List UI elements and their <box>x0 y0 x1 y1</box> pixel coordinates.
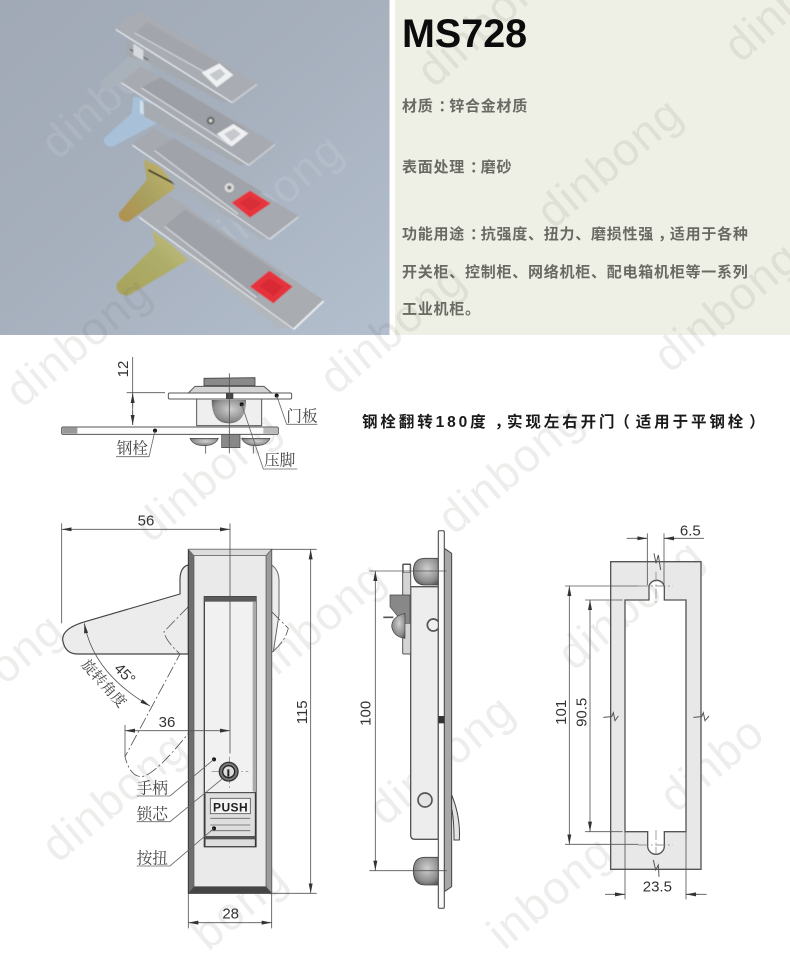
watermarks: dinbong <box>31 720 197 872</box>
lever <box>452 795 460 840</box>
panel: specification background <box>395 0 790 335</box>
text block: specifications: 功能用途 ：抗强度、扭力、磨损性强 ，适用于各种 <box>402 225 749 243</box>
label: button: 按扭 <box>137 850 168 868</box>
door plate <box>438 531 444 908</box>
text block: specifications: 材质 ：锌合金材质 <box>402 97 528 115</box>
lock 4 <box>116 230 188 296</box>
dimension: 100 <box>357 571 447 871</box>
cutout plate <box>611 562 701 869</box>
push button: PUSH <box>213 800 248 814</box>
dimension: 56 <box>62 512 230 753</box>
recess <box>204 597 256 847</box>
dimension: 115: 115 <box>294 700 311 724</box>
label: lock core <box>137 779 222 824</box>
watermarks: dinbong <box>229 550 395 702</box>
watermarks: dinbong <box>124 400 290 552</box>
dimension: 28: 28 <box>222 906 239 923</box>
label: door panel <box>275 394 318 426</box>
dimension: 28 <box>188 893 272 928</box>
lock 2 <box>104 97 160 147</box>
watermarks: dinbong <box>547 528 713 680</box>
dimension: 36: 36 <box>159 714 175 731</box>
dimension: 101 <box>553 586 638 844</box>
text block: specifications <box>402 97 749 318</box>
panel: product photo: dinbong <box>187 122 353 274</box>
watermarks: dinbong <box>526 86 692 238</box>
label: handle: 手柄 <box>137 780 168 798</box>
dimension: 12 <box>115 357 165 425</box>
bracket <box>403 564 411 654</box>
dimension: 6.5: 6.5 <box>680 522 701 539</box>
dimension: 100: 100 <box>357 701 374 726</box>
diagram: front view with dimensions <box>62 512 317 928</box>
watermarks: dinbong <box>427 392 593 544</box>
dimension: 23.5 <box>605 832 707 899</box>
label: button <box>137 826 216 868</box>
diagram: top section view <box>62 357 318 470</box>
watermarks: dinbo <box>649 705 774 822</box>
heading: bolt rotation note: 钢栓翻转180度 ，实现左右开门（适用于平钢栓） <box>362 412 768 431</box>
photo: four push-button locks <box>100 11 324 330</box>
break marks <box>603 553 709 877</box>
dimension: 36 <box>125 714 230 757</box>
label: door panel: 门板 <box>286 408 318 426</box>
dimension: 90.5 <box>574 600 623 832</box>
watermarks: dinbong <box>358 683 524 835</box>
handle <box>63 565 188 654</box>
push button <box>205 793 255 847</box>
screws <box>413 558 438 585</box>
dimension: rotation angle 45 degrees: 45° <box>111 660 139 688</box>
bolt bar <box>62 427 278 434</box>
lock body <box>188 549 272 893</box>
dimension: 115 <box>272 549 317 893</box>
label: clamp foot <box>240 402 297 470</box>
label: steel bolt: 钢栓 <box>117 440 148 458</box>
text block: specifications: 开关柜、控制柜、网络机柜、配电箱机柜等一系列 <box>402 263 749 281</box>
dimension: 56: 56 <box>138 512 154 529</box>
bezel and plate <box>204 378 255 386</box>
dimension: 101: 101 <box>553 700 570 725</box>
diagram: side view with dimensions <box>357 531 460 908</box>
lock 1 <box>100 52 152 89</box>
text block: specifications: 表面处理 ：磨砂 <box>402 158 512 176</box>
rear plate <box>444 548 452 892</box>
dimension: 6.5 <box>627 522 704 585</box>
dimension: rotation angle 45 degrees <box>78 623 150 711</box>
label: lock core: 锁芯 <box>137 805 169 824</box>
screws <box>190 438 218 446</box>
title: model number: MS728 <box>402 12 527 56</box>
label: clamp foot: 压脚 <box>264 452 296 470</box>
text block: specifications: 工业机柜。 <box>402 301 481 318</box>
dimension: 90.5: 90.5 <box>574 698 591 727</box>
lock 3 <box>119 159 175 222</box>
diagram: panel cutout with dimensions <box>553 522 709 899</box>
dimension: 23.5: 23.5 <box>643 879 672 896</box>
label: steel bolt <box>116 429 157 458</box>
label: handle <box>137 757 216 798</box>
dimension: rotation angle 45 degrees: 旋转角度 <box>78 656 131 711</box>
panel: product photo: dinbong <box>30 14 194 168</box>
panel: product photo <box>0 0 390 335</box>
lock cylinder <box>212 757 248 789</box>
dimension: 12: 12 <box>115 361 132 377</box>
body <box>411 587 438 839</box>
watermarks: dinbong <box>309 252 475 404</box>
